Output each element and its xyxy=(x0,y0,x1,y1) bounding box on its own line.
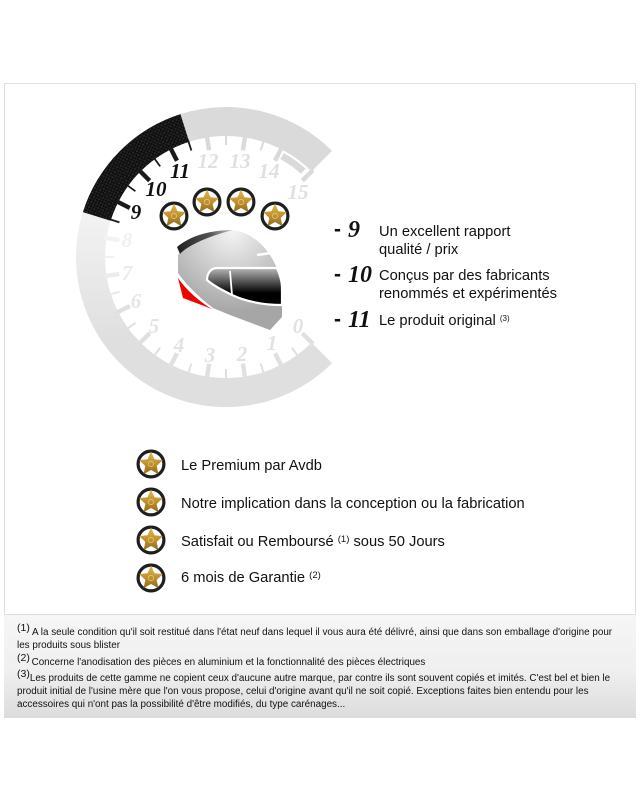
gauge numerals: 7 xyxy=(122,261,134,285)
gauge band: top right xyxy=(180,107,332,171)
item: garantie: (2) xyxy=(309,570,321,581)
gauge numerals: 0 xyxy=(293,314,304,338)
item: premium xyxy=(138,451,322,477)
helmet vent xyxy=(257,253,271,255)
gauge numerals: 13 xyxy=(230,149,250,173)
footnote 2: (2) xyxy=(17,652,30,664)
gauge numerals: 11 xyxy=(170,159,190,183)
helmet spoiler xyxy=(177,230,233,254)
item: satisfait: sous 50 Jours xyxy=(349,534,445,550)
main panel frame xyxy=(4,84,636,614)
tachometer gauge xyxy=(76,107,332,407)
gauge numerals: 14 xyxy=(258,159,280,183)
rating 10: renommés et expérimentés xyxy=(379,286,557,302)
footnote 1 xyxy=(17,622,613,651)
gauge numerals: 6 xyxy=(131,289,142,313)
rating 11 xyxy=(334,307,510,333)
rating 10: 10 xyxy=(348,262,372,288)
rating 9 xyxy=(334,217,510,258)
ratings list xyxy=(334,217,557,333)
rating 11: 11 xyxy=(348,307,371,333)
item: satisfait: Satisfait ou Remboursé xyxy=(181,534,334,550)
rating 9: 9 xyxy=(348,217,360,243)
icon: helmet xyxy=(177,230,282,330)
footnote 3 xyxy=(17,668,611,710)
gauge numerals: 10 xyxy=(146,177,167,201)
item: implication: Notre implication dans la conception ou la fabrication xyxy=(181,496,525,512)
black ticks xyxy=(109,140,191,222)
gauge numerals: 2 xyxy=(236,342,248,366)
gauge numerals xyxy=(122,149,308,367)
gauge numerals: 5 xyxy=(149,314,159,338)
rating 9: Un excellent rapport xyxy=(379,224,510,240)
gauge numerals: 4 xyxy=(173,333,184,357)
footnote 1: A la seule condition qu'il soit restitué dans l'état neuf dans lequel il vous aura été délivré, ainsi que dans son emballage d'origine pour xyxy=(30,627,613,638)
footnotes panel xyxy=(4,615,636,718)
rating 9: qualité / prix xyxy=(379,242,459,258)
item: implication xyxy=(138,489,525,515)
footnote 3: Les produits de cette gamme ne copient ceux d'aucune autre marque, par contre ils sont souvent copiés et imités. C'est bel et bien le xyxy=(30,673,611,684)
footnote 3: (3) xyxy=(17,668,30,680)
helmet red accent xyxy=(178,278,212,309)
rating 10: - xyxy=(334,263,341,286)
item: premium: Le Premium par Avdb xyxy=(181,458,322,474)
helmet shell xyxy=(178,230,282,330)
footnote 1: (1) xyxy=(17,622,30,634)
footnote 2: Concerne l'anodisation des pièces en aluminium et la fonctionnalité des pièces électriques xyxy=(29,657,425,668)
footnote 3: produit initial de l'usine mère que l'on vous propose, celui d'origine avant qu'il ne soit copié. Exceptions faites bien entendu pour les xyxy=(17,686,589,697)
rating 9: - xyxy=(334,218,341,241)
item: satisfait xyxy=(138,527,445,553)
rating 11: - xyxy=(334,308,341,331)
rating 11: (3) xyxy=(500,314,510,323)
gauge numerals: 8 xyxy=(122,228,133,252)
rating 10 xyxy=(334,262,557,302)
item: garantie: 6 mois de Garantie xyxy=(181,570,305,586)
footnote 1: les produits sous blister xyxy=(17,640,121,651)
gauge numerals: 3 xyxy=(204,343,215,367)
guarantees list xyxy=(138,451,525,591)
star badges on gauge xyxy=(161,189,288,229)
rating 10: Conçus par des fabricants xyxy=(379,268,550,284)
item: garantie xyxy=(138,565,321,591)
gauge numerals: 9 xyxy=(131,200,142,224)
gauge numerals: 15 xyxy=(288,180,308,204)
gauge band: carbon section xyxy=(83,114,189,221)
redline zone xyxy=(282,156,303,171)
gauge numerals: 12 xyxy=(198,149,219,173)
helmet visor xyxy=(207,268,282,305)
item: satisfait: (1) xyxy=(338,534,349,545)
light ticks xyxy=(103,134,313,380)
gauge band: left and bottom xyxy=(76,212,332,407)
gauge numerals: 1 xyxy=(267,331,277,355)
footnote 3: accessoires qui n'ont pas la possibilité d'être modifiés, du type carénages... xyxy=(17,699,345,710)
rating 11: Le produit original xyxy=(379,313,496,329)
